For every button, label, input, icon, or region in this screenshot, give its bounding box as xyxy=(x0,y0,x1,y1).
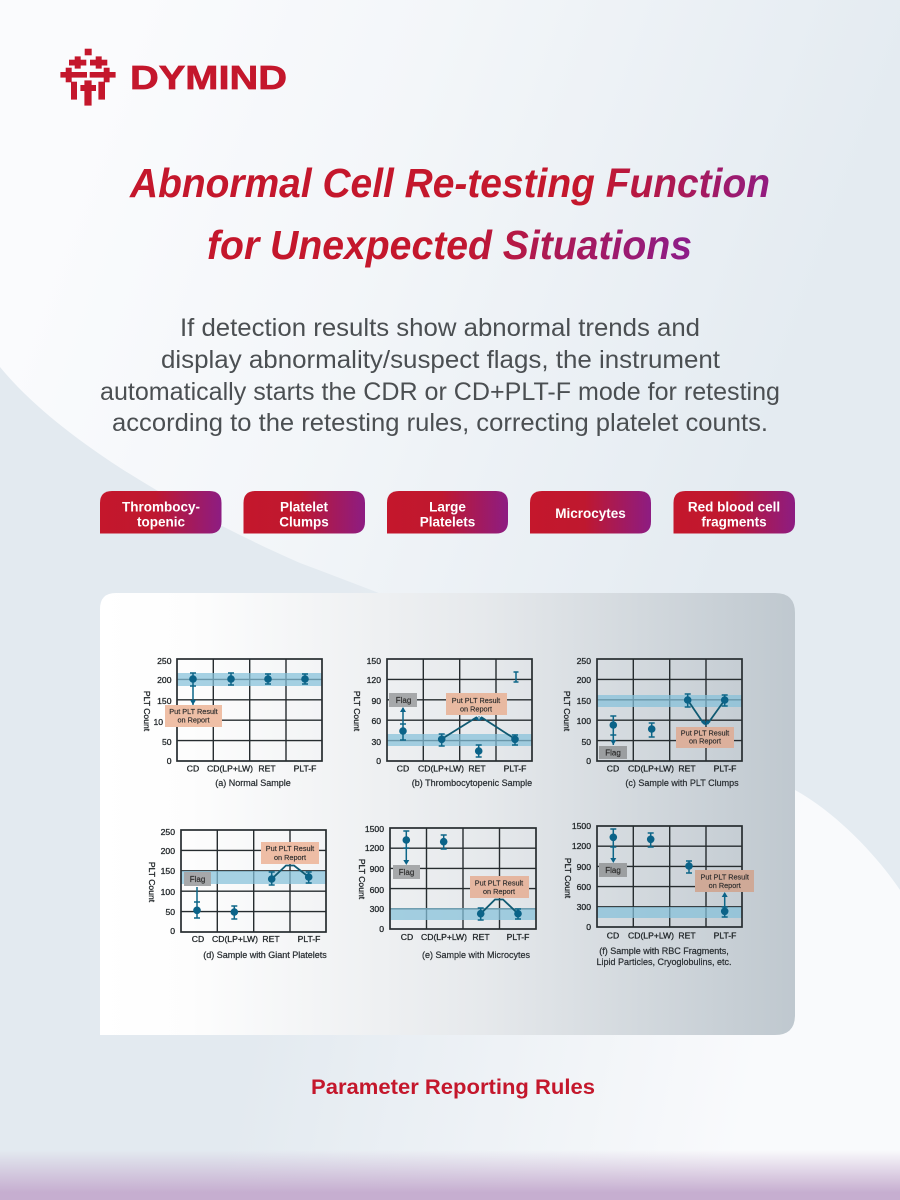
chart b: thrombocytopenic sample: PLT Count xyxy=(352,691,362,732)
chart e: microcytes sample: Flag xyxy=(399,868,414,877)
icon: logo crosses xyxy=(61,49,115,105)
pill: Large Platelets: Platelets xyxy=(420,514,475,530)
logo wordmark: DYMIND xyxy=(130,59,287,96)
chart f: RBC fragments sample: on Report xyxy=(709,881,741,890)
pill: Thrombocytopenic: Thrombocy- xyxy=(122,500,200,514)
pill: Microcytes xyxy=(530,491,651,534)
chart e: microcytes sample: 300 xyxy=(370,904,384,914)
chart c: PLT clumps sample: RET xyxy=(678,764,696,774)
chart f: RBC fragments sample: 1200 xyxy=(572,841,591,851)
caption: parameter reporting rules: Parameter Reporting Rules xyxy=(311,1076,595,1099)
chart d: giant platelets sample: 50 xyxy=(165,907,175,917)
chart f: RBC fragments sample: PLT Count xyxy=(563,858,573,899)
chart a: normal sample: Put PLT Result xyxy=(169,707,218,716)
chart b: thrombocytopenic sample: (b) Thrombocytopenic Sample xyxy=(412,778,532,788)
chart d: giant platelets sample: 250 xyxy=(161,827,175,837)
chart d: giant platelets sample: Put PLT Result xyxy=(266,844,314,853)
chart f: RBC fragments sample: 300 xyxy=(577,902,591,912)
pill: Red blood cell fragments: fragments xyxy=(701,514,767,530)
chart b: thrombocytopenic sample: Put PLT Result xyxy=(452,696,500,705)
chart e: microcytes sample: CD xyxy=(401,932,413,942)
chart b: thrombocytopenic sample: PLT-F xyxy=(504,764,526,774)
chart b: thrombocytopenic sample: Flag xyxy=(396,696,411,705)
chart e: microcytes sample: PLT-F xyxy=(507,932,529,942)
chart c: PLT clumps sample: CD(LP+LW) xyxy=(628,764,674,774)
pill: Platelet Clumps: Platelet xyxy=(280,500,329,514)
chart e: microcytes sample: PLT Count xyxy=(357,859,367,900)
chart a: normal sample: 250 xyxy=(157,656,172,666)
chart d: giant platelets sample: PLT-F xyxy=(298,934,320,944)
chart a: normal sample xyxy=(142,656,322,788)
pill: Platelet Clumps: Clumps xyxy=(279,514,329,530)
chart f: RBC fragments sample: 1500 xyxy=(572,821,591,831)
chart a: normal sample: 0 xyxy=(167,756,172,766)
chart a: normal sample: CD(LP+LW) xyxy=(207,764,253,774)
pill: Red blood cell fragments xyxy=(674,491,795,534)
chart d: giant platelets sample: 150 xyxy=(161,866,175,876)
chart f: RBC fragments sample: PLT-F xyxy=(714,930,736,940)
chart d: giant platelets sample: (d) Sample with Giant Platelets xyxy=(203,950,327,960)
chart b: thrombocytopenic sample: CD xyxy=(397,764,409,774)
chart b: thrombocytopenic sample: on Report xyxy=(460,704,492,714)
chart a: normal sample: on Report xyxy=(177,716,210,724)
intro text block: according to the retesting rules, correcting platelet counts. xyxy=(112,409,768,437)
chart a: normal sample: 50 xyxy=(162,737,172,747)
panel: parameter reporting charts xyxy=(100,593,795,1035)
logo: Dymind xyxy=(61,49,287,105)
chart b: thrombocytopenic sample: RET xyxy=(468,764,486,774)
chart b: thrombocytopenic sample: 30 xyxy=(371,737,381,747)
chart f: RBC fragments sample: Flag xyxy=(605,866,621,875)
chart d: giant platelets sample: 0 xyxy=(170,926,175,936)
intro text block: automatically starts the CDR or CD+PLT-F mode for retesting xyxy=(100,378,780,406)
chart f: RBC fragments sample: 900 xyxy=(577,862,591,872)
chart d: giant platelets sample: 100 xyxy=(161,887,175,897)
chart a: normal sample: RET xyxy=(258,764,276,774)
chart e: microcytes sample: 900 xyxy=(370,864,384,874)
intro text block xyxy=(100,314,780,437)
chart a: normal sample: 150 xyxy=(157,696,172,706)
pill: Thrombocytopenic xyxy=(100,491,222,534)
chart e: microcytes sample: on Report xyxy=(483,887,515,896)
chart e: microcytes sample: (e) Sample with Microcytes xyxy=(422,950,531,960)
chart b: thrombocytopenic sample: CD(LP+LW) xyxy=(418,764,464,774)
chart e: microcytes sample: 1200 xyxy=(365,843,384,853)
chart b: thrombocytopenic sample: 150 xyxy=(367,656,381,666)
chart b: thrombocytopenic sample: 60 xyxy=(371,716,381,726)
pill: Thrombocytopenic: topenic xyxy=(137,514,185,530)
title xyxy=(129,160,770,268)
chart a: normal sample: CD xyxy=(187,764,199,774)
chart d: giant platelets sample: 200 xyxy=(161,846,175,856)
pill: Large Platelets: Large xyxy=(429,500,466,514)
chart c: PLT clumps sample: 100 xyxy=(577,716,591,726)
chart b: thrombocytopenic sample: 120 xyxy=(367,675,381,685)
chart d: giant platelets sample: PLT Count xyxy=(147,862,157,903)
chart c: PLT clumps sample: 50 xyxy=(581,737,591,747)
chart e: microcytes sample: Put PLT Result xyxy=(475,879,523,888)
chart e: microcytes sample xyxy=(357,824,536,960)
chart c: PLT clumps sample: PLT-F xyxy=(714,764,736,774)
chart c: PLT clumps sample: (c) Sample with PLT Clumps xyxy=(625,778,739,788)
chart f: RBC fragments sample: 0 xyxy=(586,922,591,932)
chart f: RBC fragments sample: Lipid Particles, Cryoglobulins, etc. xyxy=(596,957,732,967)
chart d: giant platelets sample: Flag xyxy=(190,875,205,884)
chart c: PLT clumps sample: CD xyxy=(607,764,619,774)
chart c: PLT clumps sample: 150 xyxy=(577,696,591,706)
pill: Microcytes: Microcytes xyxy=(555,506,626,521)
pill: Platelet Clumps xyxy=(244,491,365,534)
chart c: PLT clumps sample xyxy=(562,656,742,788)
chart c: PLT clumps sample: 0 xyxy=(586,756,591,766)
category pills xyxy=(100,491,795,534)
chart c: PLT clumps sample: PLT Count xyxy=(562,691,572,732)
chart f: RBC fragments sample: CD(LP+LW) xyxy=(628,930,674,940)
chart e: microcytes sample: 600 xyxy=(370,885,384,895)
chart c: PLT clumps sample: Put PLT Result xyxy=(681,728,729,738)
chart f: RBC fragments sample: Put PLT Result xyxy=(700,872,749,882)
chart a: normal sample: (a) Normal Sample xyxy=(215,778,291,788)
pill: Red blood cell fragments: Red blood cell xyxy=(688,500,780,514)
chart f: RBC fragments sample: 600 xyxy=(577,882,591,892)
chart a: normal sample: PLT-F xyxy=(294,764,316,774)
chart f: RBC fragments sample: CD xyxy=(607,930,619,940)
chart b: thrombocytopenic sample: 0 xyxy=(376,756,381,766)
title: Abnormal Cell Re-testing Function xyxy=(129,160,770,206)
chart e: microcytes sample: CD(LP+LW) xyxy=(421,932,467,942)
chart a: normal sample: 200 xyxy=(157,675,172,685)
chart f: RBC fragments sample: RET xyxy=(678,930,696,940)
chart d: giant platelets sample: on Report xyxy=(274,853,306,862)
chart f: RBC fragments sample: (f) Sample with RBC Fragments, xyxy=(599,946,729,956)
chart c: PLT clumps sample: on Report xyxy=(689,736,721,746)
pill: Large Platelets xyxy=(387,491,508,534)
chart d: giant platelets sample xyxy=(147,827,327,960)
intro text block: If detection results show abnormal trends and xyxy=(180,314,700,342)
chart d: giant platelets sample: CD xyxy=(192,934,204,944)
chart c: PLT clumps sample: 200 xyxy=(577,675,591,685)
title: for Unexpected Situations xyxy=(207,222,692,268)
chart a: normal sample: 10 xyxy=(153,717,163,727)
chart e: microcytes sample: RET xyxy=(472,932,490,942)
chart f: RBC fragments sample xyxy=(563,821,754,967)
chart b: thrombocytopenic sample: 90 xyxy=(371,696,381,706)
chart a: normal sample: PLT Count xyxy=(142,691,152,732)
chart c: PLT clumps sample: 250 xyxy=(577,656,591,666)
chart c: PLT clumps sample: Flag xyxy=(605,748,621,758)
chart d: giant platelets sample: CD(LP+LW) xyxy=(212,934,258,944)
chart b: thrombocytopenic sample xyxy=(352,656,532,788)
chart e: microcytes sample: 0 xyxy=(379,924,384,934)
intro text block: display abnormality/suspect flags, the instrument xyxy=(161,346,720,374)
chart e: microcytes sample: 1500 xyxy=(365,824,384,834)
chart d: giant platelets sample: RET xyxy=(262,934,280,944)
